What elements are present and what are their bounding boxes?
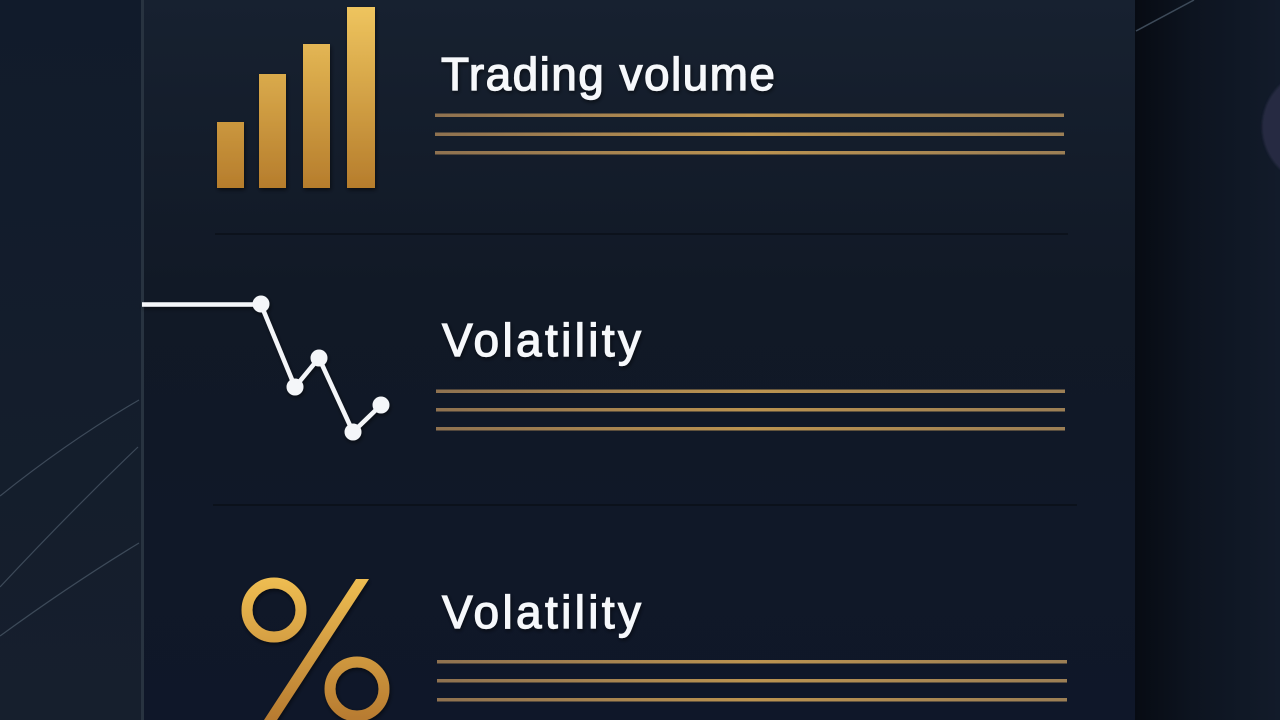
heading: volatility: Volatility [442,314,641,366]
row: volatility line chart [142,296,1065,440]
icon: line chart [142,296,390,440]
text placeholder lines [437,660,1067,702]
row: volatility percent [247,579,1067,720]
text placeholder lines [436,390,1065,430]
icon: bar chart [217,7,375,188]
background curve top right [1136,0,1194,31]
icon: percent sign [247,579,384,720]
row: trading volume [217,7,1065,188]
background circle right [1262,69,1280,185]
right background strip [1135,0,1280,720]
main panel [141,0,1135,720]
background curves left [0,400,139,636]
heading: volatility: Volatility [442,586,641,638]
heading: trading volume: Trading volume [441,48,775,100]
row divider [213,504,1077,506]
row divider [215,233,1068,235]
text placeholder lines [435,114,1065,154]
